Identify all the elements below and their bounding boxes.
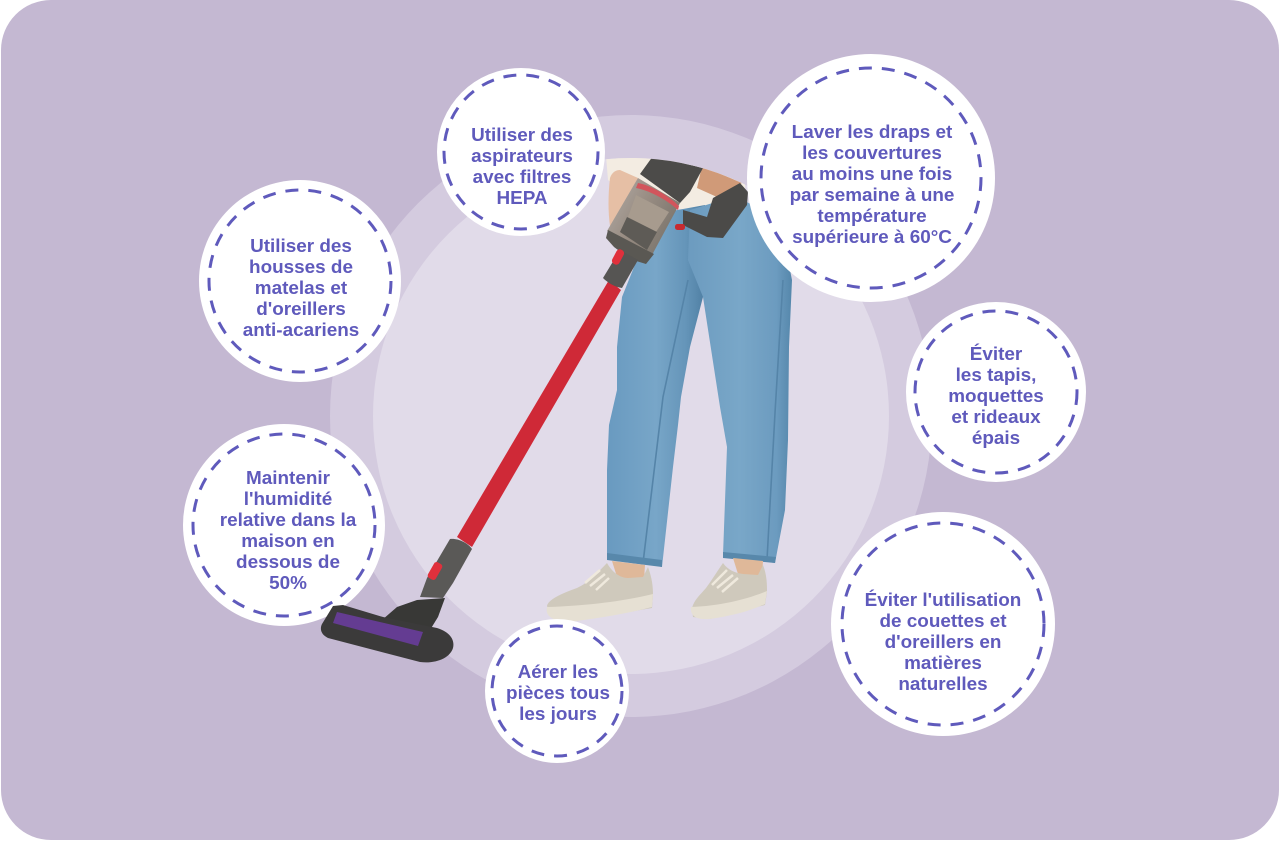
bubble: laver les draps: par semaine à une (790, 185, 954, 206)
bubble: couettes: naturelles (898, 674, 988, 695)
bubble: housses anti-acariens: anti-acariens (243, 320, 359, 341)
left sole (547, 594, 653, 622)
bubble: laver les draps: au moins une fois (792, 164, 952, 185)
bubble: laver les draps: les couvertures (802, 143, 942, 164)
dust bin (607, 178, 680, 255)
bin dark core (620, 217, 657, 250)
bin base (606, 230, 654, 264)
bubble: housses anti-acariens: matelas et (255, 278, 348, 299)
bubble: éviter tapis: Éviter (970, 343, 1023, 365)
bin tan section (628, 195, 669, 232)
bubble: humidité: l'humidité (244, 489, 332, 510)
bubble: aspirateurs HEPA: Utiliser des (471, 125, 573, 146)
bubble: couettes: matières (904, 653, 982, 674)
bubble: housses anti-acariens: housses de (249, 257, 353, 278)
bubble: laver les draps: supérieure à 60°C (792, 227, 952, 248)
left laces (585, 570, 609, 590)
lower connector (420, 539, 472, 598)
bubble: éviter tapis: moquettes (948, 386, 1044, 407)
bubble: humidité: Maintenir (246, 468, 331, 489)
left ankle (612, 561, 645, 578)
bubble: éviter tapis: épais (972, 428, 1020, 449)
jeans seams (643, 280, 783, 563)
bubble: couettes: Éviter l'utilisation (865, 589, 1021, 611)
bubble: housses anti-acariens: Utiliser des (250, 236, 352, 257)
red button (611, 248, 625, 266)
outer halo circle (330, 115, 932, 717)
head body (321, 605, 453, 662)
bubble: couettes: de couettes et (879, 611, 1007, 632)
bubble: aérer: Aérer les (518, 662, 598, 683)
purple roller (333, 612, 423, 646)
neck (382, 598, 445, 630)
lower red button (427, 561, 443, 581)
bubble: éviter tapis: et rideaux (951, 407, 1041, 428)
left hand (608, 170, 638, 226)
bubble: laver les draps: température (817, 206, 927, 227)
sweater (606, 156, 745, 210)
bubble: éviter tapis (906, 302, 1086, 482)
bubble: laver les draps: Laver les draps et (792, 122, 953, 143)
bubble: humidité: relative dans la (220, 510, 357, 531)
bubble: humidité: dessous de (236, 552, 340, 573)
person with vacuum body (547, 156, 792, 622)
right ankle (733, 558, 763, 576)
bubble: housses anti-acariens (199, 180, 401, 382)
right hem (723, 552, 776, 563)
right shoe (692, 563, 767, 619)
motor cap (640, 156, 703, 203)
bubble: humidité: 50% (269, 573, 307, 594)
bubble: humidité: maison en (241, 531, 335, 552)
bubble: aspirateurs HEPA: aspirateurs (471, 146, 573, 167)
bubble: couettes: d'oreillers en (885, 632, 1001, 653)
bubble: aérer (485, 619, 629, 763)
left leg of jeans (607, 205, 705, 567)
bubble: aérer: les jours (519, 704, 597, 725)
vacuum tube and head (321, 248, 638, 662)
bubble: aspirateurs HEPA: avec filtres (473, 167, 571, 188)
right laces (712, 570, 738, 592)
inner halo circle (373, 158, 889, 674)
left hem (607, 553, 662, 567)
handle (683, 183, 748, 238)
bubble: aspirateurs HEPA (437, 68, 605, 236)
bubble: laver les draps (747, 54, 995, 302)
bubble: housses anti-acariens: d'oreillers (256, 299, 346, 320)
red ring (636, 183, 679, 210)
bubble: humidité (183, 424, 385, 626)
right sole (691, 591, 767, 619)
bubble: éviter tapis: les tapis, (956, 365, 1036, 386)
left shoe (547, 563, 653, 610)
red tube (457, 280, 621, 547)
bubble: couettes (831, 512, 1055, 736)
right hand (697, 166, 742, 197)
trigger (675, 224, 685, 230)
bubble: aspirateurs HEPA: HEPA (496, 188, 548, 209)
upper connector (603, 250, 638, 288)
bubble: aérer: pièces tous (506, 683, 610, 704)
right leg of jeans (688, 196, 792, 563)
